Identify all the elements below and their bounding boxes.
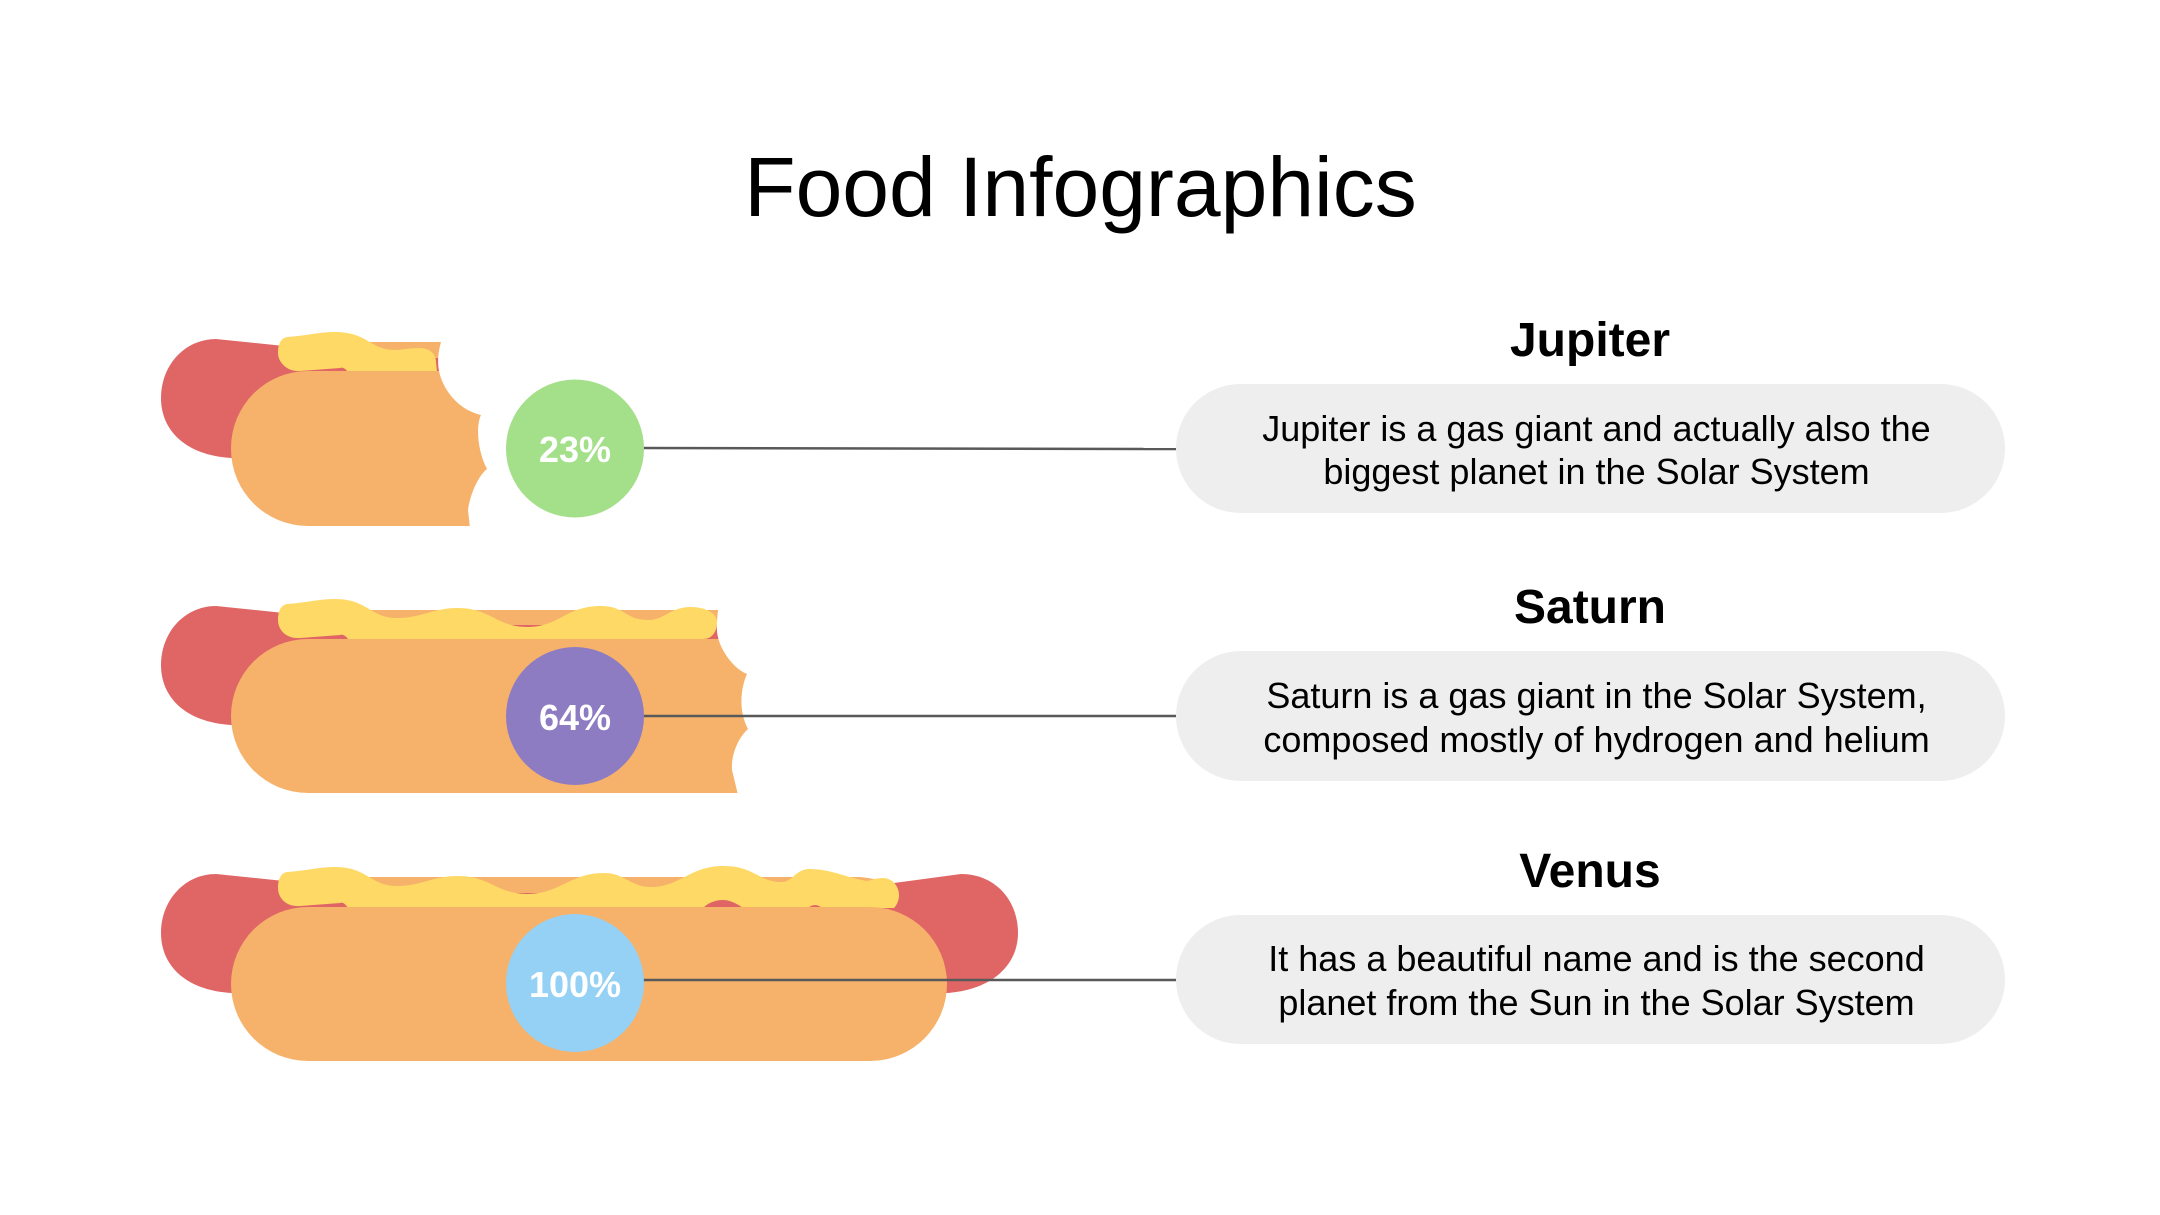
pill: Saturn description: Saturn is a gas giant in the Solar System, bbox=[1266, 675, 1927, 716]
pill: Venus description: planet from the Sun in the Solar System bbox=[1278, 982, 1915, 1023]
pill: Jupiter description bbox=[1176, 384, 2005, 513]
heading: Venus: Venus bbox=[1519, 845, 1661, 898]
pill: Venus description bbox=[1176, 915, 2005, 1044]
badge: 64%: 64% bbox=[539, 697, 611, 738]
badge: 23% bbox=[506, 380, 644, 518]
pill: Jupiter description: Jupiter is a gas giant and actually also the bbox=[1262, 408, 1931, 449]
title: Food Infographics bbox=[744, 140, 1417, 234]
icon: hot dog 23% bbox=[161, 330, 660, 528]
connector line: Jupiter bbox=[640, 448, 1176, 449]
icon: hot dog 100% bbox=[161, 866, 1018, 1061]
heading: Jupiter: Jupiter bbox=[1510, 314, 1670, 367]
badge: 64% bbox=[506, 647, 644, 785]
pill: Saturn description: composed mostly of hydrogen and helium bbox=[1263, 719, 1930, 760]
badge: 100%: 100% bbox=[529, 964, 621, 1005]
pill: Saturn description bbox=[1176, 651, 2005, 781]
pill: Jupiter description: biggest planet in the Solar System bbox=[1323, 451, 1870, 492]
heading: Saturn: Saturn bbox=[1514, 581, 1666, 634]
badge: 23%: 23% bbox=[539, 429, 611, 470]
pill: Venus description: It has a beautiful name and is the second bbox=[1268, 938, 1925, 979]
connector line: Saturn bbox=[640, 715, 1176, 717]
connector line: Venus bbox=[640, 979, 1176, 981]
badge: 100% bbox=[506, 914, 644, 1052]
icon: hot dog 64% bbox=[161, 596, 900, 795]
